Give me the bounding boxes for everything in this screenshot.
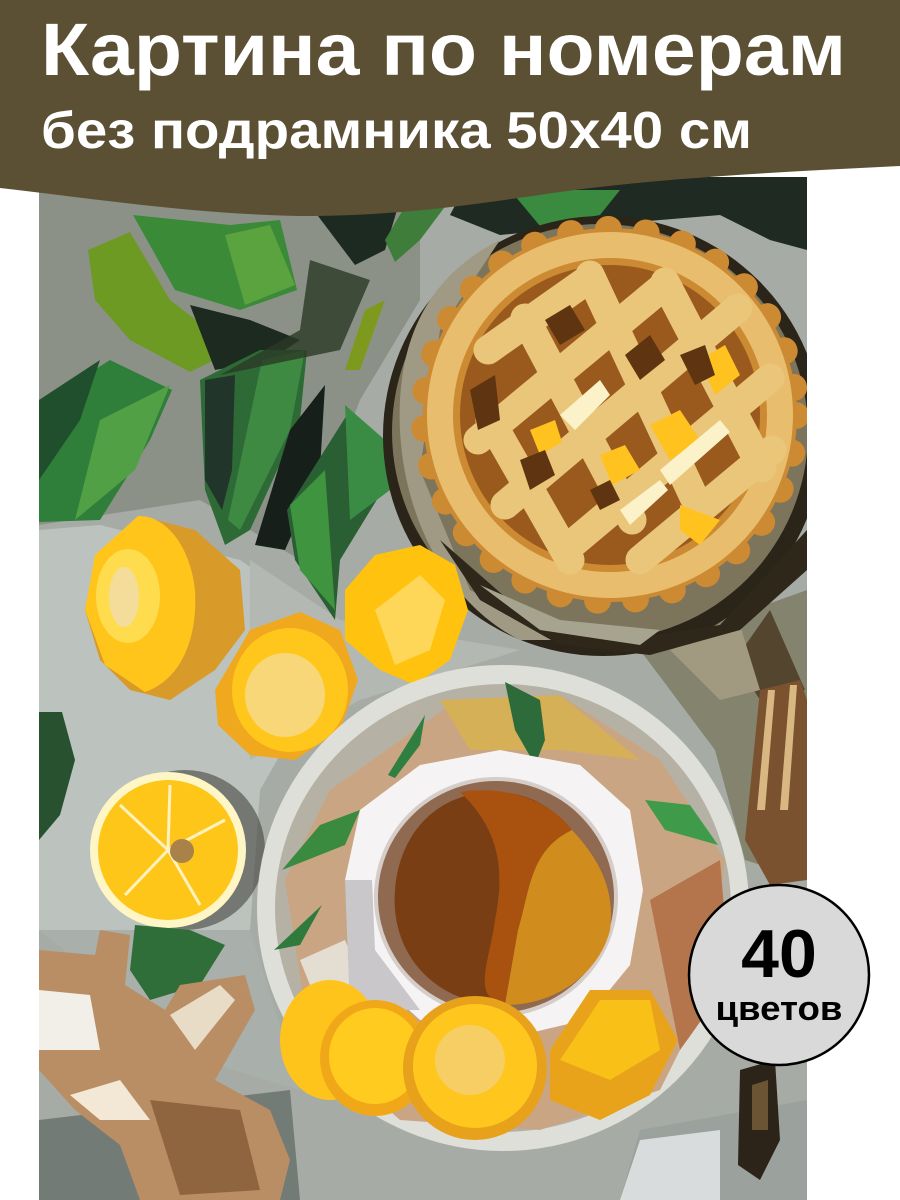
dark leaves at top right [315,177,807,265]
dark plate [383,216,823,656]
title: Картина по номерам [41,8,846,91]
crust [423,228,797,602]
header banner [0,0,900,216]
ginger [39,925,290,1200]
subtitle: без подрамника 50х40 см [41,102,752,160]
lemons [85,516,468,930]
badge: 40 colours: цветов [716,990,842,1028]
tea cup [345,750,643,1040]
lattice [478,275,772,560]
badge: 40 colours: 40 [741,916,817,992]
saucer [257,665,749,1151]
badge: 40 colours [689,885,869,1065]
fork and knife [620,680,807,1200]
green leaves [39,215,395,840]
pie [383,216,823,656]
lemon slices on saucer [280,980,678,1140]
painting: tea, pie and lemons [39,177,823,1200]
